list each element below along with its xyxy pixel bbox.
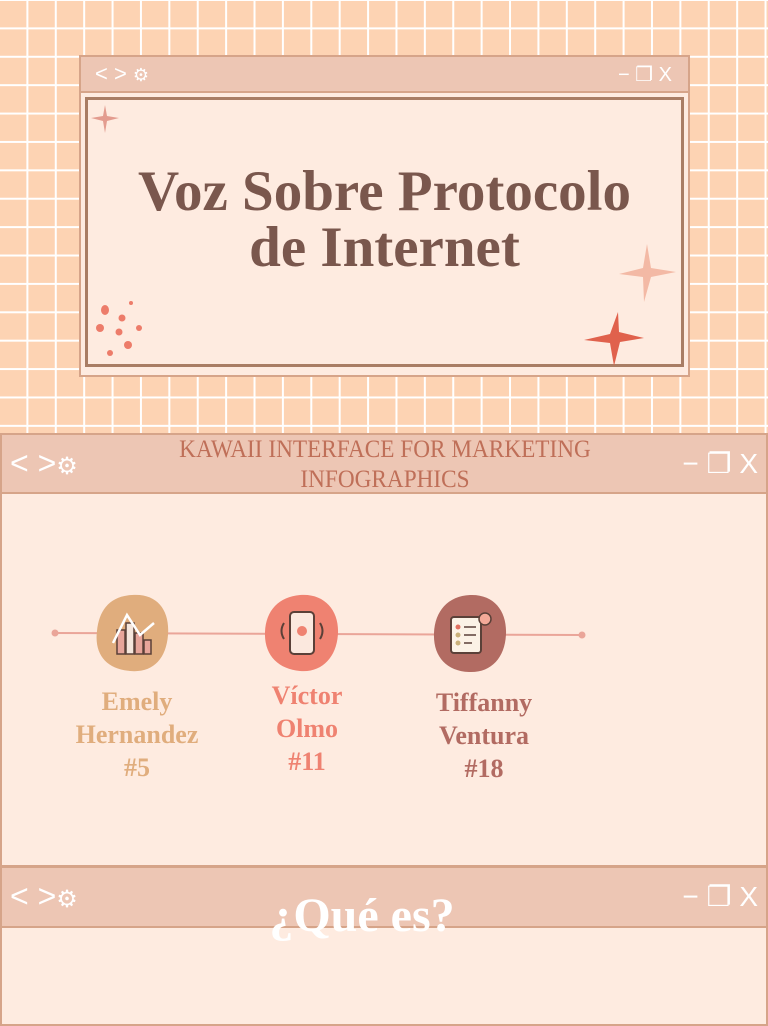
icon: small star (91, 106, 119, 132)
text: Tiffanny: Tiffanny (436, 688, 532, 717)
text: Tiffanny: Ventura (439, 721, 529, 750)
panel: title window (79, 55, 690, 377)
icon: nav arrows and gear: < >⚙ (10, 878, 78, 914)
heading (179, 436, 591, 493)
text: Tiffanny (436, 688, 532, 783)
icon: window controls: − ❐ X (682, 881, 758, 912)
text: Emely: Hernandez (76, 720, 198, 749)
text: Victor: Olmo (276, 714, 338, 743)
text: Victor: Víctor (272, 681, 342, 710)
heading: ¿Qué es? (269, 889, 455, 942)
panel: team window (0, 433, 768, 867)
timeline (52, 594, 586, 672)
text: Emely: Emely (102, 687, 172, 716)
heading: INFOGRAPHICS (300, 466, 470, 493)
heading: KAWAII INTERFACE FOR MARKETING (179, 436, 591, 463)
icon: window controls: − ❐ X (682, 448, 758, 479)
title bar (0, 433, 768, 494)
icon: nav arrows and gear: < >⚙ (10, 445, 78, 481)
icon: dots (96, 301, 142, 356)
text: Emely (76, 687, 198, 782)
title bar (0, 866, 768, 928)
icon: nav arrows and gear: < > ⚙ (95, 61, 149, 86)
panel: que es window (0, 866, 768, 1026)
inner frame (85, 97, 684, 367)
text: Victor: #11 (288, 747, 326, 776)
icon: phone (265, 595, 338, 671)
title: Voz Sobre Protocolo (138, 160, 631, 223)
title: de Internet (249, 216, 520, 279)
icon: pale star (620, 244, 676, 302)
icon: window controls: − ❐ X (618, 64, 672, 86)
icon: checklist (434, 595, 506, 672)
text: Victor (272, 681, 342, 776)
title bar (79, 55, 690, 93)
icon: red star (584, 312, 644, 366)
text: Emely: #5 (124, 753, 150, 782)
text: Tiffanny: #18 (464, 754, 504, 783)
title (138, 160, 631, 279)
icon: chart (97, 595, 168, 671)
